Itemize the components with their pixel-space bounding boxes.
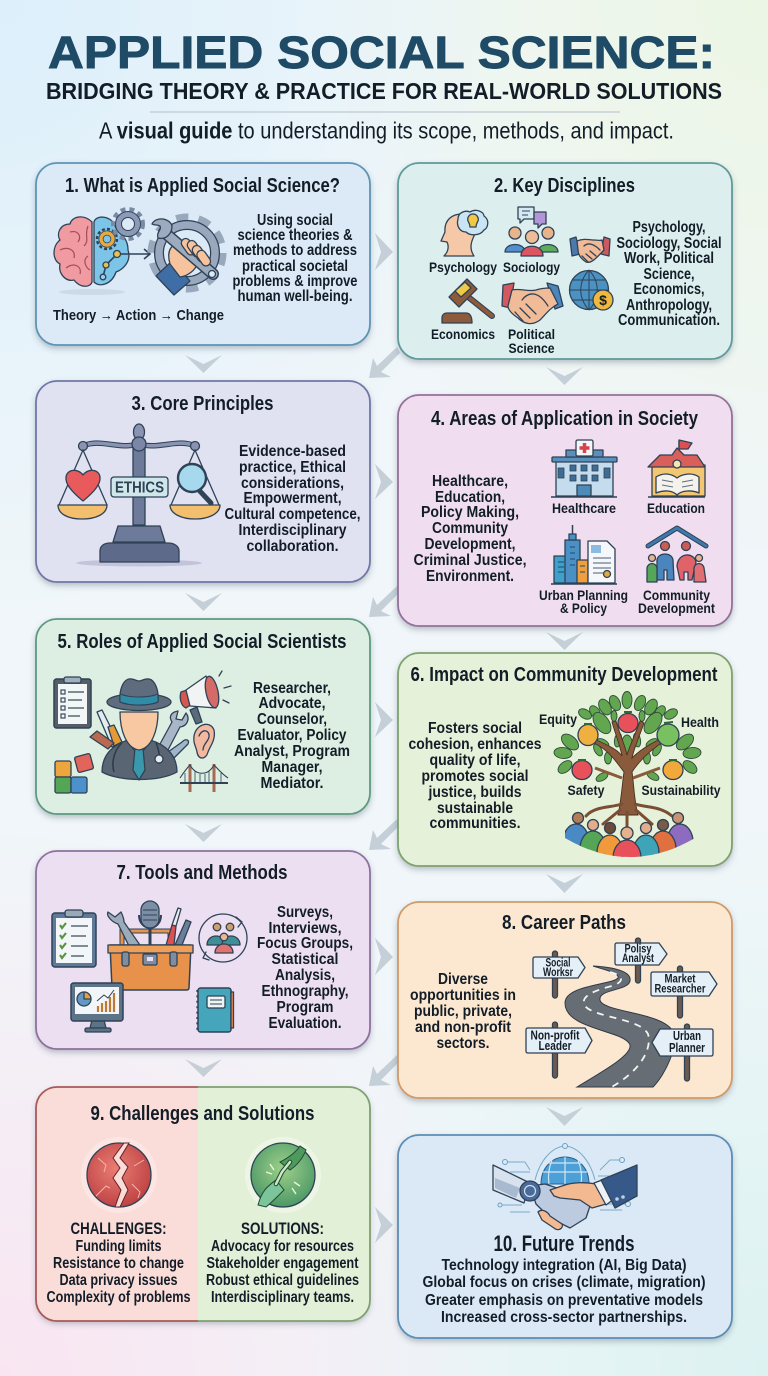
label: urban planning and policy [539, 587, 628, 616]
arrow: down 2 to 4 [546, 367, 583, 385]
description 7: Evaluation. [268, 1015, 342, 1032]
description 1: human well-being. [238, 288, 352, 305]
icon: community tree [554, 692, 701, 876]
icon: urban planning [551, 525, 617, 584]
description 3: Cultural competence, [224, 506, 360, 523]
arrow: down 7 to 9 [185, 1059, 222, 1077]
arrow: 3 to 4 [375, 464, 393, 499]
icon: school with book [648, 440, 705, 497]
label: urban planning and policy: & Policy [560, 600, 607, 616]
arrow: diagonal 4 to 5 [369, 586, 400, 617]
arrow: down 8 to 10 [546, 1107, 583, 1126]
icon: linked hands circle [245, 1137, 321, 1213]
panel 8: career paths [398, 902, 732, 1098]
icon: monitor chart [71, 983, 123, 1032]
description 6: communities. [430, 815, 520, 832]
icon: cracked circle [81, 1137, 157, 1213]
description 7: Statistical [272, 951, 338, 968]
icon: bridge [180, 764, 228, 792]
description 8: Diverse [438, 971, 488, 988]
description 8: and non-profit [415, 1019, 512, 1036]
description 5: Researcher, [253, 680, 331, 697]
description 4: Criminal Justice, [414, 552, 526, 569]
caption: theory action change: Theory → Action → Change [53, 307, 224, 324]
description 8: sectors. [436, 1035, 490, 1052]
panel 4: areas of application [398, 395, 732, 626]
description 1: practical societal [242, 258, 348, 275]
solutions list: SOLUTIONS: [241, 1219, 324, 1238]
icon: psychology head [441, 210, 488, 256]
label: safety: Safety [568, 782, 605, 798]
label: equity: Equity [539, 711, 577, 727]
signpost: urban planner [652, 1024, 713, 1081]
icon: globe with coin: $ [599, 292, 607, 308]
challenges list: Data privacy issues [60, 1272, 178, 1289]
panel 6: impact on community [398, 653, 732, 876]
description 5: Evaluator, Policy [238, 727, 347, 744]
heading 1: 1. What is Applied Social Science? [65, 174, 340, 197]
icon: scale of ethics: ETHICS [115, 480, 164, 496]
description 3: Empowerment, [244, 490, 342, 507]
description 10: Increased cross-sector partnerships. [441, 1309, 687, 1326]
heading 7: 7. Tools and Methods [116, 861, 288, 884]
solutions list [206, 1219, 359, 1306]
signpost: market researcher [651, 966, 717, 1018]
label: community development: Development [638, 600, 715, 616]
icon: gavel [442, 279, 492, 323]
signpost: urban planner: Planner [669, 1041, 705, 1055]
description 2: Work, Political [624, 250, 714, 267]
icon: hospital [551, 440, 617, 497]
challenges list: Resistance to change [53, 1255, 184, 1272]
description 3: Interdisciplinary [238, 522, 347, 539]
icon: winding road with signposts [526, 938, 717, 1088]
description 7: Analysis, [275, 967, 335, 984]
solutions list: Robust ethical guidelines [206, 1272, 359, 1289]
challenges list: Complexity of problems [46, 1289, 191, 1306]
arrow: 5 to 6 [375, 702, 393, 737]
description 10 [422, 1257, 706, 1326]
icon: group cycle [199, 914, 247, 962]
heading 5: 5. Roles of Applied Social Scientists [58, 630, 346, 653]
description 10: Greater emphasis on preventative models [425, 1292, 703, 1309]
description 5: Analyst, Program [234, 743, 350, 760]
label: sustainability: Sustainability [642, 782, 721, 798]
description 4: Community [432, 520, 508, 537]
heading 10: 10. Future Trends [494, 1231, 634, 1256]
icon: globe with coin [569, 270, 613, 310]
signpost: market researcher: Researcher [654, 984, 706, 996]
panel 10: future trends [398, 1135, 732, 1338]
icon: sociology people [505, 207, 558, 256]
icon: puzzle [55, 753, 94, 793]
icon: researcher figure with tools [90, 679, 189, 780]
description 3: Evidence-based [239, 443, 346, 460]
label: political science [508, 326, 555, 356]
solutions list: Interdisciplinary teams. [211, 1289, 354, 1306]
label: political science: Political [508, 326, 555, 342]
panel 9: challenges and solutions [36, 1087, 370, 1321]
heading 4: 4. Areas of Application in Society [431, 407, 698, 430]
panel 3: core principles [36, 381, 370, 582]
description 7 [257, 904, 353, 1032]
icon: large handshake [502, 283, 563, 324]
description 5 [234, 680, 350, 792]
description 1: Using social [257, 212, 333, 229]
description 6: sustainable [437, 800, 513, 817]
tagline: A visual guide to understanding its scope, methods, and impact. [99, 118, 674, 144]
signpost: policy analyst: Analyst [622, 953, 654, 965]
heading 8: 8. Career Paths [502, 911, 626, 934]
description 10: Global focus on crises (climate, migration) [422, 1274, 706, 1291]
panel 5: roles [36, 619, 370, 814]
heading 2: 2. Key Disciplines [494, 174, 635, 197]
description 7: Focus Groups, [257, 935, 353, 952]
arrow: down 5 to 7 [185, 824, 222, 842]
description 8: public, private, [414, 1003, 512, 1020]
description 5: Advocate, [258, 695, 326, 712]
description 5: Manager, [262, 759, 322, 776]
description 4: Policy Making, [421, 504, 519, 521]
icon: notebook [197, 988, 234, 1032]
label: urban planning and policy: Urban Planning [539, 587, 628, 603]
description 7: Surveys, [277, 904, 333, 921]
subtitle: BRIDGING THEORY & PRACTICE FOR REAL-WORLD SOLUTIONS [46, 78, 722, 104]
arrow: 7 to 8 [375, 938, 393, 975]
signpost: policy analyst [615, 938, 667, 983]
description 6: promotes social [422, 768, 528, 785]
icon: family under roof [647, 528, 706, 582]
label: community development [638, 587, 715, 616]
icon: ear [194, 724, 214, 758]
description 6: Fosters social [428, 720, 522, 737]
description 4 [414, 473, 526, 585]
challenges list [46, 1219, 191, 1306]
panel 7: tools and methods [36, 851, 370, 1049]
description 2 [616, 219, 722, 329]
solutions list: Advocacy for resources [211, 1238, 354, 1255]
description 5: Mediator. [260, 775, 324, 792]
description 7: Program [276, 999, 334, 1016]
heading 9: 9. Challenges and Solutions [90, 1102, 314, 1125]
panel 1: what is applied social science [36, 163, 370, 345]
description 6 [408, 720, 542, 832]
label: education: Education [647, 500, 705, 516]
description 5: Counselor, [257, 711, 327, 728]
icon: robot and human handshake [493, 1144, 637, 1230]
description 2: Economics, [634, 281, 704, 298]
description 4: Environment. [426, 568, 514, 585]
label: community development: Community [643, 587, 710, 603]
description 2: Psychology, [632, 219, 706, 236]
arrow: diagonal 8 to 9 [369, 1055, 400, 1086]
icon: brain to action [54, 209, 222, 295]
description 7: Interviews, [268, 920, 342, 937]
label: political science: Science [508, 340, 555, 356]
icon: megaphone [180, 671, 231, 724]
icon: scale of ethics [58, 424, 220, 566]
description 8: opportunities in [410, 987, 516, 1004]
description 7: Ethnography, [262, 983, 348, 1000]
arrow: down 6 to 8 [546, 874, 583, 893]
description 3: considerations, [241, 475, 344, 492]
challenges list: CHALLENGES: [70, 1219, 166, 1238]
description 4: Development, [424, 536, 516, 553]
description 3: practice, Ethical [239, 459, 346, 476]
label: psychology: Psychology [429, 259, 497, 275]
signpost: non-profit leader: Leader [538, 1039, 572, 1053]
title: APPLIED SOCIAL SCIENCE: [48, 27, 715, 78]
label: health: Health [681, 714, 719, 730]
description 4: Education, [435, 489, 505, 506]
icon: clipboard [54, 677, 91, 728]
signpost: social worker [533, 951, 585, 998]
description 1: methods to address [233, 242, 357, 259]
arrow: 1 to 2 [375, 233, 393, 270]
description 3 [224, 443, 360, 555]
description 6: cohesion, enhances [408, 736, 542, 753]
arrow: down 4 to 6 [546, 632, 583, 650]
signpost: non-profit leader: Non-profit [530, 1028, 580, 1042]
description 2: Sociology, Social [616, 235, 722, 252]
challenges list: Funding limits [76, 1238, 162, 1255]
signpost: policy analyst: Polisy [624, 944, 652, 956]
description 6: quality of life, [430, 752, 520, 769]
description 8 [410, 971, 516, 1052]
signpost: social worker: Social [546, 958, 570, 970]
description 1: science theories & [238, 227, 353, 244]
arrow: down 1 to 3 [185, 355, 222, 373]
description 2: Anthropology, [626, 297, 712, 314]
panel 2: key disciplines [398, 163, 732, 359]
description 6: justice, builds [428, 784, 522, 801]
description 1 [232, 212, 358, 305]
icon: small handshake [570, 237, 610, 262]
solutions list: Stakeholder engagement [206, 1255, 359, 1272]
signpost: urban planner: Urban [673, 1029, 701, 1043]
signpost: non-profit leader [526, 1022, 592, 1078]
description 10: Technology integration (AI, Big Data) [442, 1257, 686, 1274]
description 1: problems & improve [232, 273, 358, 290]
signpost: social worker: Worksr [543, 967, 573, 979]
arrow: 9 to 10 [375, 1207, 393, 1243]
heading 3: 3. Core Principles [132, 392, 274, 415]
arrow: down 3 to 5 [185, 593, 222, 611]
description 4: Healthcare, [432, 473, 508, 490]
icon: toolbox [108, 901, 193, 990]
description 3: collaboration. [246, 538, 338, 555]
description 2: Communication. [618, 312, 720, 329]
signpost: market researcher: Market [664, 974, 696, 986]
label: healthcare: Healthcare [552, 500, 616, 516]
arrow: diagonal 2 to 3 [369, 347, 400, 378]
description 2: Science, [644, 266, 694, 283]
icon: checklist clipboard [52, 910, 96, 967]
label: sociology: Sociology [503, 259, 560, 275]
label: economics: Economics [431, 326, 495, 342]
arrow: diagonal 6 to 7 [369, 819, 400, 850]
